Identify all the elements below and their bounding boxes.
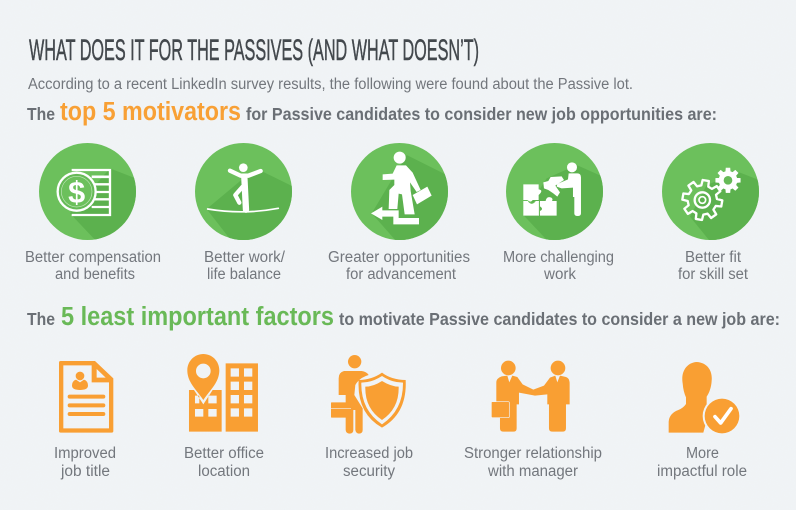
- icon: compensation: $: [68, 176, 85, 210]
- label: relationship with manager: [464, 445, 602, 480]
- heading: top 5 motivators: top 5 motivators: [60, 98, 241, 126]
- label: advancement: for advancement: [346, 266, 457, 283]
- label: compensation: and benefits: [55, 266, 135, 283]
- label: job title: job title: [60, 463, 110, 480]
- label: work life balance: [204, 249, 286, 283]
- label: job security: [325, 445, 413, 480]
- label: impactful role: More: [686, 445, 719, 462]
- heading: 5 least important factors: 5 least important factors: [61, 303, 334, 331]
- label: office location: location: [198, 463, 250, 480]
- label: relationship with manager: with manager: [487, 463, 578, 480]
- label: impactful role: impactful role: [657, 463, 747, 480]
- label: challenging work: More challenging: [503, 249, 614, 266]
- label: office location: [184, 445, 264, 480]
- label: job title: [54, 445, 116, 480]
- icon: balance: [195, 143, 297, 245]
- icon: impactful role: [669, 362, 741, 435]
- label: impactful role: [657, 445, 747, 480]
- icon: challenging work: [506, 143, 607, 245]
- label: office location: Better office: [184, 445, 264, 462]
- label: work life balance: Better work/: [204, 249, 286, 266]
- icon: compensation: [39, 143, 140, 245]
- heading: 5 least important factors: The: [27, 309, 55, 329]
- heading: top 5 motivators: The: [27, 104, 55, 124]
- icon: job security: [331, 355, 406, 434]
- heading: top 5 motivators: for Passive candidates to consider new job opportunities are:: [246, 104, 717, 124]
- label: compensation: [25, 249, 161, 283]
- label: job title: Improved: [54, 445, 116, 462]
- label: skill set: [678, 249, 749, 283]
- label: challenging work: [503, 249, 614, 283]
- icon: handshake: [491, 361, 570, 432]
- label: job security: Increased job: [325, 445, 413, 462]
- heading: 5 least important factors: [27, 303, 780, 331]
- icon: advancement: [351, 143, 453, 245]
- heading: top 5 motivators: [27, 98, 717, 126]
- label: advancement: Greater opportunities: [328, 249, 470, 266]
- label: compensation: Better compensation: [25, 249, 161, 266]
- icon: job title document: [59, 361, 113, 433]
- label: work life balance: life balance: [207, 266, 281, 283]
- label: skill set: for skill set: [678, 266, 749, 283]
- intro text: According to a recent LinkedIn survey results, the following were found about the Passive lot.: [28, 76, 633, 93]
- label: skill set: Better fit: [685, 249, 742, 266]
- label: relationship with manager: Stronger relationship: [464, 445, 602, 462]
- label: advancement: [328, 249, 470, 283]
- label: challenging work: work: [543, 266, 576, 283]
- icon: gears: [662, 143, 763, 245]
- icon: office location: [187, 354, 258, 432]
- label: job security: security: [343, 463, 395, 480]
